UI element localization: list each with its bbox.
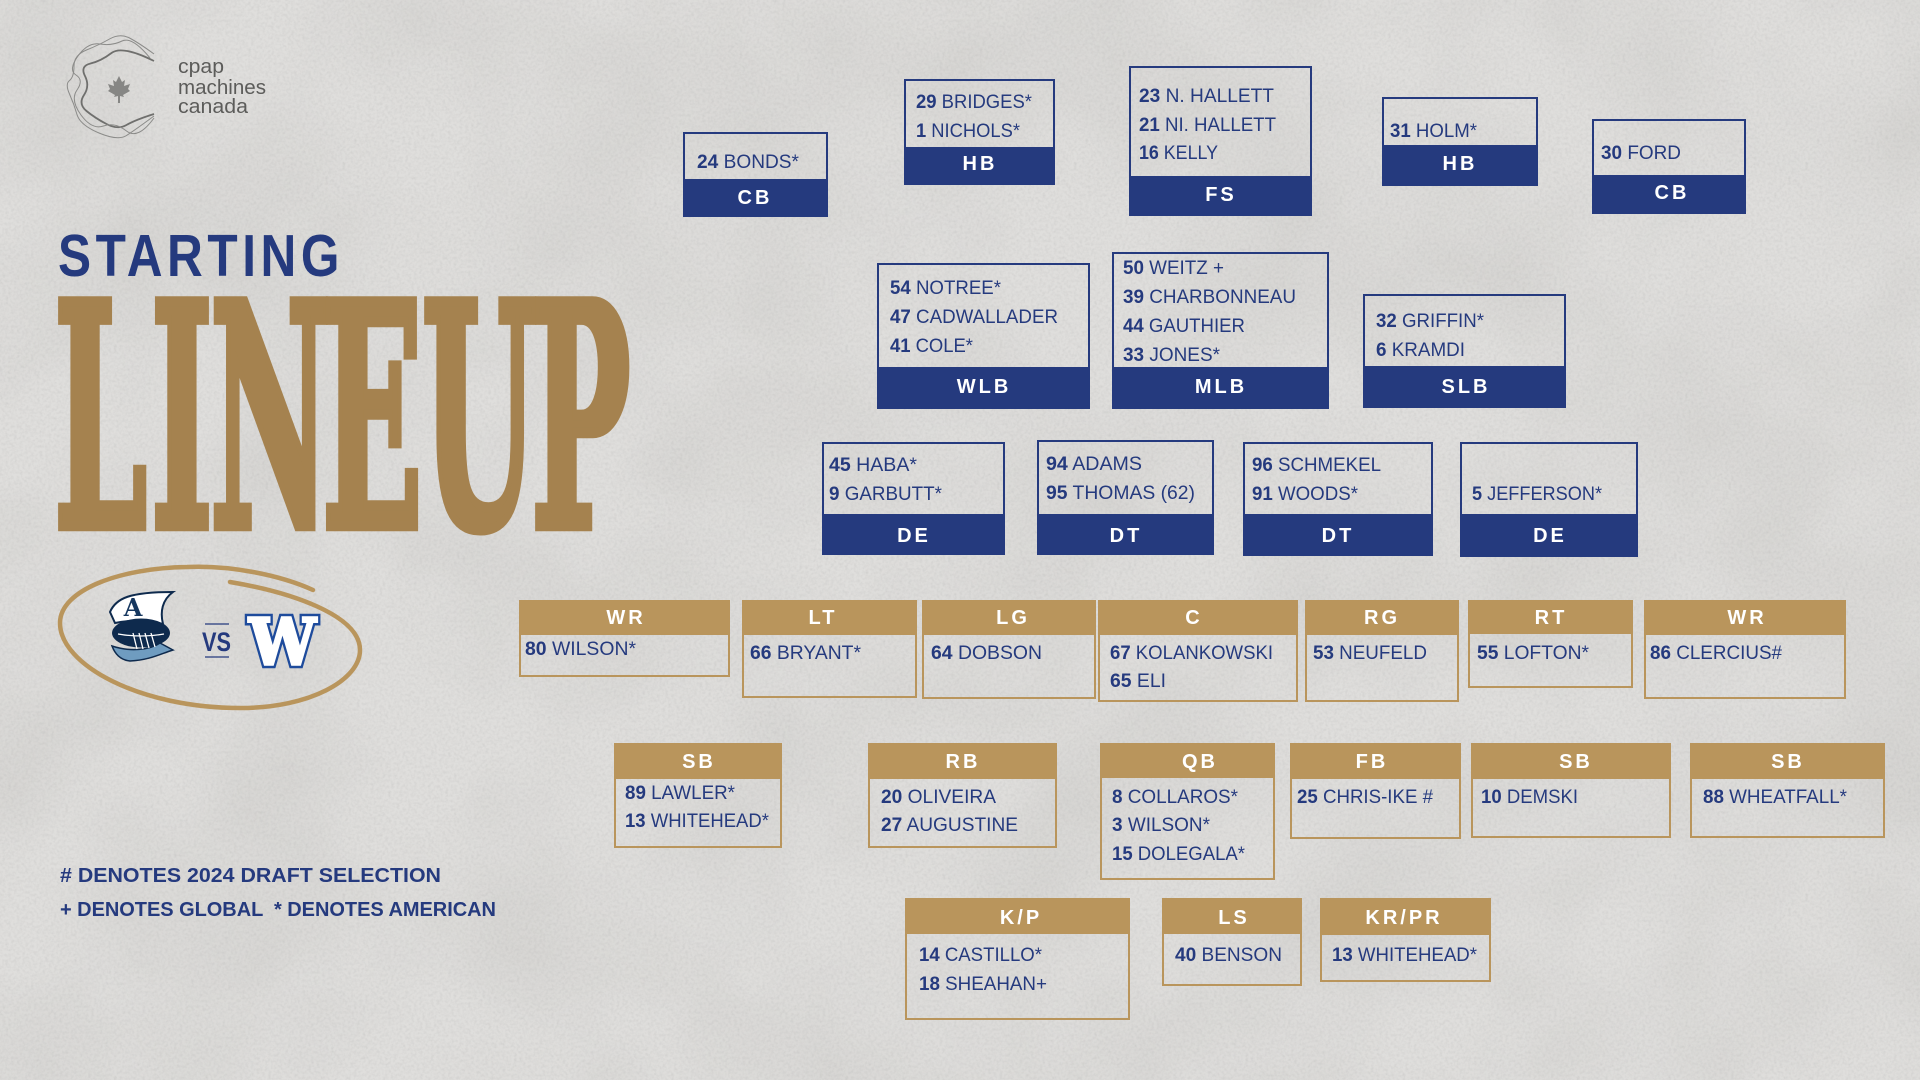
position: HB: HB	[1443, 153, 1477, 175]
panel: FS	[1129, 67, 1312, 216]
panel: SB far right	[1690, 743, 1885, 837]
position: CB: CB	[1655, 182, 1689, 204]
position: HB	[904, 147, 1055, 185]
position: SLB: SLB	[1442, 376, 1490, 398]
players	[1376, 311, 1485, 361]
players: 64 DOBSON	[931, 643, 1042, 664]
players: 29 BRIDGES*	[916, 92, 1033, 113]
position: DT	[1243, 514, 1433, 556]
legend notes	[60, 865, 496, 921]
players	[890, 278, 1058, 357]
position: DE: DE	[897, 525, 931, 547]
position: DE: DE	[1533, 525, 1567, 547]
panel: WLB	[877, 264, 1090, 409]
position: WR: WR	[606, 607, 646, 629]
players: 88 WHEATFALL*	[1703, 787, 1848, 808]
players: 1 NICHOLS*	[916, 121, 1021, 142]
players: 27 AUGUSTINE	[881, 815, 1018, 836]
panel: DT left	[1037, 441, 1214, 555]
players: 32 GRIFFIN*	[1376, 311, 1485, 332]
players: 13 WHITEHEAD*	[625, 811, 770, 832]
players: 9 GARBUTT*	[829, 484, 943, 505]
players: 55 LOFTON*	[1477, 643, 1590, 664]
players: 5 JEFFERSON*	[1472, 484, 1603, 505]
players: 41 COLE*	[890, 336, 974, 357]
players: 10 DEMSKI	[1481, 787, 1578, 808]
players	[625, 783, 770, 832]
players: 47 CADWALLADER	[890, 307, 1058, 328]
position: C	[1098, 600, 1298, 635]
icon: Blue Bombers W logo: W	[248, 605, 317, 680]
players: 8 COLLAROS*	[1112, 787, 1239, 808]
position: LT: LT	[809, 607, 837, 629]
players: 67 KOLANKOWSKI	[1110, 643, 1273, 664]
icon: Argonauts logo	[110, 592, 173, 661]
players: 65 ELI	[1110, 671, 1166, 692]
players: 21 NI. HALLETT	[1139, 115, 1276, 136]
position: WR	[1644, 600, 1846, 635]
position: WLB: WLB	[957, 376, 1011, 398]
players: 18 SHEAHAN+	[919, 974, 1047, 995]
position: RB: RB	[946, 751, 980, 773]
position: FS	[1129, 176, 1312, 216]
panel: KR/PR	[1320, 898, 1491, 981]
position: FB: FB	[1356, 751, 1388, 773]
panel: DT right	[1243, 443, 1433, 556]
players	[829, 455, 943, 505]
matchup: teams circled	[60, 567, 360, 708]
position: DE	[822, 514, 1005, 555]
position: C: C	[1185, 607, 1203, 629]
players: 54 NOTREE*	[890, 278, 1002, 299]
icon: wavy C ring	[67, 36, 154, 138]
panel: WR left	[519, 600, 730, 676]
panel: LT	[742, 600, 917, 697]
players: 25 CHRIS-IKE #	[1297, 787, 1433, 808]
position: SLB	[1363, 366, 1566, 408]
players	[1110, 643, 1273, 692]
panel: C	[1098, 600, 1298, 701]
position: MLB	[1112, 367, 1329, 409]
position: LT	[742, 600, 917, 635]
players: 44 GAUTHIER	[1123, 316, 1245, 337]
position: SB	[1690, 743, 1885, 779]
players: 96 SCHMEKEL	[1252, 455, 1381, 476]
panel: SB far left	[614, 743, 782, 847]
position: LG	[922, 600, 1096, 635]
icon: maple leaf	[108, 76, 130, 103]
position: RT	[1468, 600, 1633, 634]
position: LS: LS	[1218, 907, 1250, 929]
panel: DE left	[822, 443, 1005, 555]
position: FB	[1290, 743, 1461, 779]
players	[881, 787, 1018, 836]
position: SB: SB	[1559, 751, 1593, 773]
position: DT: DT	[1110, 525, 1142, 547]
position: LG: LG	[996, 607, 1030, 629]
players: 31 HOLM*	[1390, 121, 1478, 142]
players: 66 BRYANT*	[750, 643, 862, 664]
players: 33 JONES*	[1123, 345, 1221, 366]
title	[54, 223, 630, 599]
players: 30 FORD	[1601, 143, 1681, 164]
icon: Blue Bombers W logo: W	[248, 605, 317, 680]
players	[1252, 455, 1381, 505]
panel: HB right	[1382, 98, 1538, 186]
position: WR: WR	[1727, 607, 1767, 629]
position: MLB: MLB	[1195, 376, 1247, 398]
position: K/P: K/P	[1000, 907, 1042, 929]
players: 15 DOLEGALA*	[1112, 844, 1246, 865]
players: 80 WILSON*	[525, 639, 637, 660]
position: KR/PR	[1320, 898, 1491, 935]
panel: WR right	[1644, 600, 1846, 698]
position: QB	[1100, 743, 1275, 778]
panel: DE right	[1460, 443, 1638, 557]
players: 16 KELLY	[1139, 143, 1218, 164]
panel: CB right	[1592, 120, 1746, 214]
logo: cpap machines canada	[67, 36, 266, 138]
panel: CB left	[683, 133, 828, 217]
position: HB: HB	[963, 153, 997, 175]
players: 13 WHITEHEAD*	[1332, 945, 1478, 966]
players: 94 ADAMS	[1046, 454, 1142, 475]
players: 91 WOODS*	[1252, 484, 1359, 505]
players	[916, 92, 1033, 142]
players	[1139, 86, 1276, 164]
position: SB	[614, 743, 782, 779]
logo wordmark	[178, 56, 266, 118]
hand-drawn circle	[60, 567, 360, 708]
position: DT: DT	[1322, 525, 1354, 547]
panel: LS	[1162, 898, 1302, 985]
panel: K/P	[905, 898, 1130, 1019]
panel: SLB	[1363, 295, 1566, 408]
panel: LG	[922, 600, 1096, 698]
panel: HB left	[904, 80, 1055, 185]
position: HB	[1382, 145, 1538, 186]
players	[1112, 787, 1246, 865]
position: RG	[1305, 600, 1459, 635]
players	[1046, 454, 1195, 504]
position: CB: CB	[738, 187, 772, 209]
icon: Argonauts logo: A	[123, 593, 143, 622]
panel: QB	[1100, 743, 1275, 879]
players: 53 NEUFELD	[1313, 643, 1427, 664]
position: K/P	[905, 898, 1130, 934]
panel: RG	[1305, 600, 1459, 701]
panel: RT	[1468, 600, 1633, 687]
position: DE	[1460, 514, 1638, 557]
players: 23 N. HALLETT	[1139, 86, 1274, 107]
logo wordmark: canada	[178, 96, 249, 118]
players: 45 HABA*	[829, 455, 918, 476]
players: 86 CLERCIUS#	[1650, 643, 1782, 664]
panel: SB middle	[1471, 743, 1671, 837]
players: 20 OLIVEIRA	[881, 787, 996, 808]
position: WLB	[877, 367, 1090, 409]
players: 3 WILSON*	[1112, 815, 1211, 836]
position: SB: SB	[682, 751, 716, 773]
legend notes: # DENOTES 2024 DRAFT SELECTION	[60, 865, 441, 887]
title line: LINEUP: LINEUP	[54, 237, 630, 599]
position: KR/PR: KR/PR	[1365, 907, 1443, 929]
panel: MLB	[1112, 253, 1329, 409]
position: SB: SB	[1771, 751, 1805, 773]
position: WR	[519, 600, 730, 635]
position: FS: FS	[1205, 184, 1237, 206]
players: 39 CHARBONNEAU	[1123, 287, 1296, 308]
position: CB	[1592, 175, 1746, 214]
logo wordmark: machines	[178, 77, 266, 99]
position: RB	[868, 743, 1057, 779]
title line: STARTING: STARTING	[58, 223, 339, 289]
players	[919, 945, 1047, 995]
logo wordmark: cpap	[178, 56, 224, 78]
legend notes: + DENOTES GLOBAL * DENOTES AMERICAN	[60, 899, 496, 921]
position: CB	[683, 179, 828, 217]
players: 50 WEITZ +	[1123, 258, 1224, 279]
players	[1123, 258, 1296, 366]
players: 24 BONDS*	[697, 152, 800, 173]
players: 40 BENSON	[1175, 945, 1282, 966]
VS label: VS	[202, 627, 231, 657]
position: SB	[1471, 743, 1671, 779]
players: 89 LAWLER*	[625, 783, 736, 804]
panel: RB	[868, 743, 1057, 847]
position: QB: QB	[1182, 751, 1218, 773]
panel: FB	[1290, 743, 1461, 838]
players: 6 KRAMDI	[1376, 340, 1465, 361]
position: RT: RT	[1535, 607, 1567, 629]
position: RG: RG	[1364, 607, 1400, 629]
players: 95 THOMAS (62)	[1046, 483, 1195, 504]
players: 14 CASTILLO*	[919, 945, 1043, 966]
position: DT	[1037, 514, 1214, 555]
